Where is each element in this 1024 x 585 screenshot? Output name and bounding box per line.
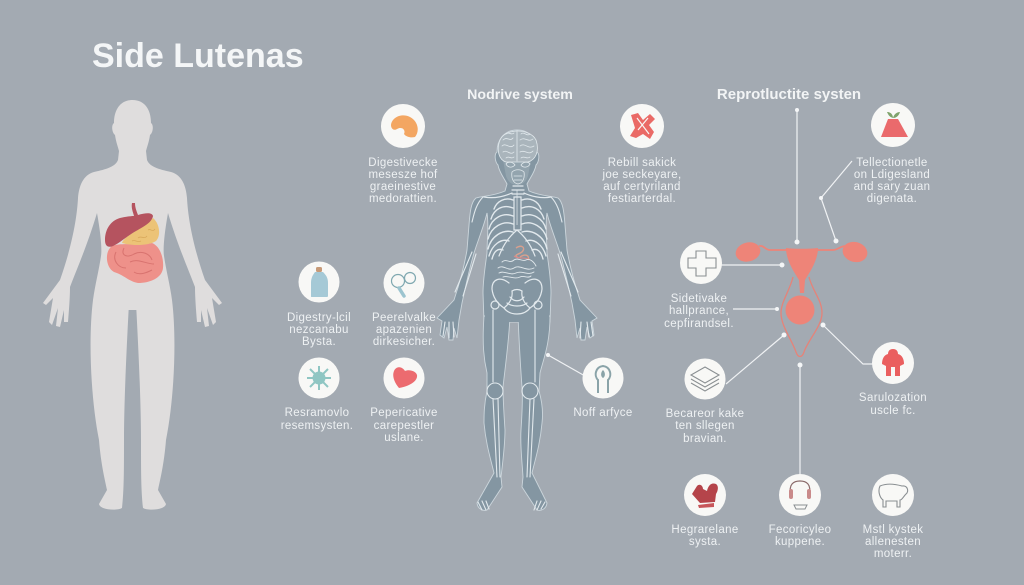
icon: orange organ (381, 104, 425, 148)
organ: uterus (786, 248, 818, 293)
text: resramovlo: resemsysten. (281, 420, 353, 432)
text: noff arfyce: Noff arfyce (573, 407, 633, 419)
organ: ovary right (840, 239, 870, 265)
icon: magnifier (384, 262, 424, 304)
text: peerelvalke: Peerelvalke (372, 312, 436, 324)
organ: liver (105, 203, 153, 247)
text: rebill: Rebill sakick (608, 157, 676, 169)
body: right arm and torso (517, 130, 597, 340)
text: hegrarelane: systa. (689, 536, 721, 548)
organ: intestines (107, 243, 163, 283)
left body figure with organs (43, 100, 222, 510)
icon: headset (779, 474, 821, 516)
skeleton: limbs (443, 197, 593, 510)
center body figure with skeleton (437, 130, 597, 510)
text: fecoricyleo: kuppene. (775, 536, 825, 548)
text: pepericative: Pepericative (370, 407, 438, 419)
skeleton: brain (498, 131, 537, 184)
icon: heart (384, 358, 424, 398)
text: sidetivake: Sidetivake (671, 293, 727, 305)
icon: bottle (298, 262, 340, 302)
text: fecoricyleo: Fecoricyleo (769, 524, 831, 536)
text: digestry: nezcanabu (289, 324, 349, 336)
heading: reproductive system: Reprotluctite systen (717, 86, 861, 103)
skeleton: pelvis (491, 279, 542, 314)
text: pepericative: uslane. (384, 432, 424, 444)
text: digestive: medorattien. (369, 193, 437, 205)
body: left leg (477, 316, 510, 510)
organ: pancreas (122, 218, 159, 245)
organ: outline (781, 277, 822, 356)
text: tellectionetle: and sary zuan (854, 181, 930, 193)
icon: red cross (620, 104, 664, 148)
body: right leg (518, 316, 550, 510)
icon: teal star (298, 358, 340, 398)
skeleton: left ribs (488, 199, 513, 259)
title: Side Lutenas (92, 37, 304, 75)
text: resramovlo: Resramovlo (285, 407, 349, 419)
text: digestry: Bysta. (302, 336, 336, 348)
text: sidetivake: hallprance, (669, 305, 729, 317)
icon: nerve tool (582, 358, 624, 398)
text: pepericative: carepestler (374, 420, 434, 432)
text: becareor: bravian. (683, 433, 727, 445)
skeleton: right ribs (522, 199, 547, 259)
organ: fallopian tubes (759, 246, 846, 250)
text: digestive: Digestivecke (368, 157, 438, 169)
reproductive organs diagram (733, 239, 870, 356)
text: mstl kystek: allenesten (865, 536, 921, 548)
text: rebill: joe seckeyare, (601, 169, 682, 181)
body: left arm and torso (437, 130, 517, 340)
text: mstl kystek: moterr. (874, 548, 912, 560)
text: sarulozation: uscle fc. (870, 405, 916, 417)
organ: ovary left (733, 240, 763, 264)
text: tellectionetle: digenata. (867, 193, 917, 205)
text: mstl kystek: Mstl kystek (863, 524, 923, 536)
icon: red hill with leaves (871, 103, 915, 147)
text: becareor: ten sllegen (675, 420, 735, 432)
text: sarulozation: Sarulozation (859, 392, 927, 404)
connector lines (546, 108, 873, 475)
skeleton: spine and collarbones (484, 186, 551, 256)
text: hegrarelane: Hegrarelane (671, 524, 739, 536)
text: peerelvalke: apazenien (376, 324, 432, 336)
icon: sheep (872, 474, 914, 516)
text: rebill: auf certyriland (603, 181, 681, 193)
icon: plus (680, 242, 722, 284)
icon: layers (684, 358, 726, 400)
organ: circle (786, 296, 814, 324)
text: digestry: Digestry-lcil (287, 312, 351, 324)
text: peerelvalke: dirkesicher. (373, 336, 435, 348)
text: becareor: Becareor kake (666, 408, 744, 420)
skeleton: digestive organs (498, 246, 536, 278)
icon: red figure (872, 342, 914, 384)
text: tellectionetle: on Ldigesland (854, 169, 930, 181)
text: digestive: mesesze hof (368, 169, 438, 181)
heading: nodrive system: Nodrive system (467, 87, 573, 103)
text: digestive: graeinestive (370, 181, 436, 193)
text: rebill: festiarterdal. (608, 193, 676, 205)
text: sidetivake: cepfirandsel. (664, 318, 734, 330)
icon: red crown (684, 474, 726, 516)
text: tellectionetle: Tellectionetle (856, 157, 928, 169)
